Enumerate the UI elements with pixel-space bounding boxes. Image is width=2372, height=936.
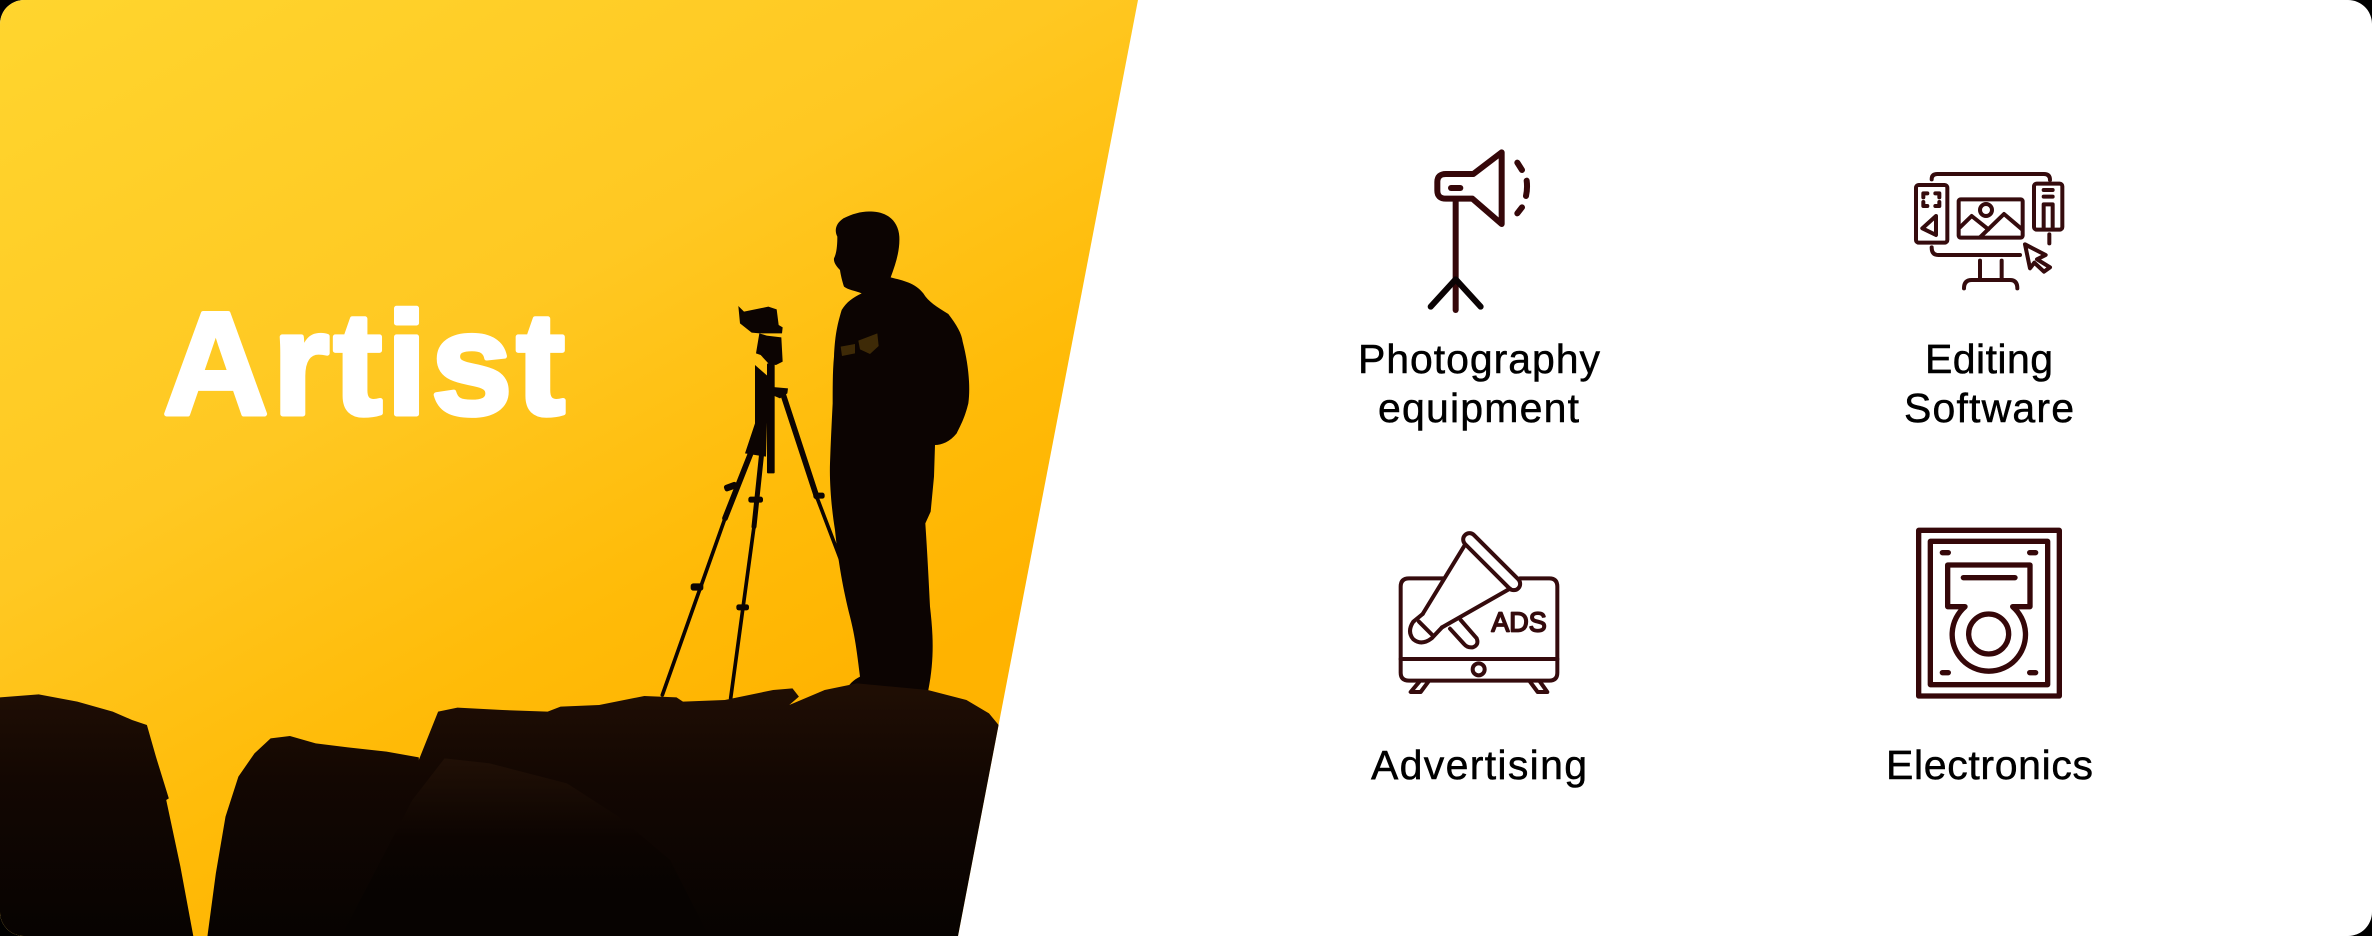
right rock mass xyxy=(418,684,998,936)
icon: studio light on stand xyxy=(1431,152,1527,310)
item: advertising xyxy=(1371,531,1587,788)
rock formations xyxy=(0,683,1010,936)
item: electronics xyxy=(1886,530,2093,788)
person silhouette xyxy=(830,211,969,690)
label: Advertising: Advertising xyxy=(1371,742,1587,788)
left rock xyxy=(0,694,193,936)
label: Editing Software: Software xyxy=(1904,385,2074,431)
icon: hard disk drive xyxy=(1919,530,2059,696)
foreground rock xyxy=(430,758,550,780)
label: Editing Software: Editing xyxy=(1925,336,2053,382)
panel: photo of photographer at sunset xyxy=(0,0,1140,936)
title: Artist: Artist xyxy=(163,282,565,445)
label: Photography equipment: Photography xyxy=(1358,336,1600,382)
label: Photography equipment: equipment xyxy=(1378,385,1580,431)
label: Electronics: Electronics xyxy=(1886,742,2093,788)
tripod and camera silhouette xyxy=(662,306,843,698)
sunset sky xyxy=(0,0,1140,936)
middle rock xyxy=(207,736,425,936)
item: editing software xyxy=(1904,174,2074,431)
icon: monitor with editing panels xyxy=(1916,174,2062,288)
icon: megaphone over television: ADS xyxy=(1491,607,1547,638)
icon: megaphone over television xyxy=(1401,531,1557,692)
item: photography equipment xyxy=(1358,152,1612,431)
